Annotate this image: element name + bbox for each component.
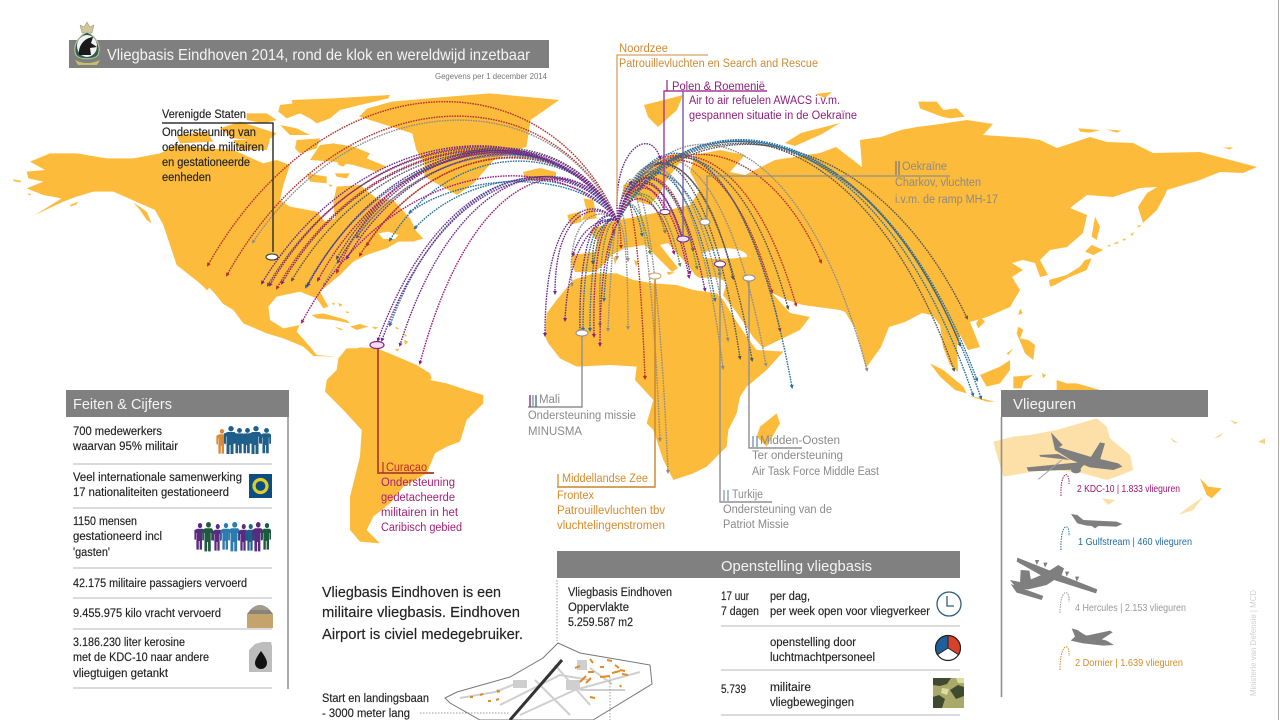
Caribbean and South America	[312, 303, 483, 543]
callout: Polen en Roemenie	[660, 80, 857, 242]
callout: Verenigde Staten: eenheden	[162, 172, 211, 184]
row: flight movements: 5.739	[721, 684, 746, 696]
fact: kerosine: 3.186.230 liter kerosine	[73, 637, 185, 649]
label: Hercules	[1060, 593, 1186, 614]
callout: Oekraine: Charkov, vluchten	[895, 177, 981, 189]
fact: medewerkers: waarvan 95% militair	[72, 441, 178, 453]
fact: mensen	[73, 516, 162, 559]
callout: Curacao: gedetacheerde	[381, 492, 455, 504]
flight arcs from Eindhoven	[208, 102, 981, 472]
runway label: - 3000 meter lang	[322, 708, 410, 720]
data date note: Gegevens per 1 december 2014	[435, 71, 547, 81]
title bar	[69, 40, 549, 68]
label: KDC-10: 2 KDC-10 | 1.833 vlieguren	[1077, 483, 1180, 495]
area facts: Oppervlakte	[568, 602, 629, 614]
runway label: Start en landingsbaan	[322, 693, 429, 705]
intro text: militaire vliegbasis. Eindhoven	[322, 604, 520, 621]
callout: Polen en Roemenie: Air to air refuelen AWACS i.v.m.	[689, 95, 840, 107]
panel: Openstelling vliegbasis	[557, 551, 964, 720]
fact: mensen: 1150 mensen	[73, 516, 137, 528]
title bar: Vliegbasis Eindhoven 2014, rond de klok en wereldwijd inzetbaar	[107, 47, 531, 64]
icon: EU flag	[249, 474, 272, 498]
callout: Verenigde Staten: Verenigde Staten	[162, 109, 246, 121]
callout: Polen en Roemenie: Polen & Roemenië	[672, 81, 765, 93]
row: flight movements: vliegbewegingen	[770, 697, 854, 709]
icon: clock	[937, 592, 961, 616]
fact: kerosine: vliegtuigen getankt	[73, 668, 169, 680]
callout: Middellandse Zee	[557, 273, 665, 532]
fact: mensen: gestationeerd incl	[73, 531, 162, 543]
callout: Mali: MINUSMA	[528, 426, 582, 438]
intro text: Vliegbasis Eindhoven is een	[322, 584, 501, 601]
intro text: Airport is civiel medegebruiker.	[322, 626, 523, 643]
label: Dornier: 2 Dornier | 1.639 vlieguren	[1075, 657, 1183, 669]
row: personnel: luchtmachtpersoneel	[770, 652, 875, 664]
callout: Middellandse Zee: Frontex	[557, 490, 594, 502]
callout: Midden-Oosten: Air Task Force Middle East	[752, 466, 880, 478]
label: Dornier	[1060, 647, 1183, 670]
callout: Oekraine: i.v.m. de ramp MH-17	[895, 194, 998, 206]
row: opening hours: 7 dagen	[721, 606, 759, 618]
callout: Midden-Oosten: Ter ondersteuning	[752, 450, 843, 462]
callout: Curacao: Ondersteuning	[381, 477, 455, 489]
row: opening hours: 17 uur	[721, 591, 749, 603]
fact: samenwerking: Veel internationale samenwerking	[73, 472, 242, 484]
heading: Feiten en Cijfers: Feiten & Cijfers	[73, 396, 172, 413]
callout: Curacao	[370, 342, 462, 534]
aircraft: KDC-10	[1027, 432, 1122, 479]
callout: Curacao: militairen in het	[381, 507, 459, 519]
aircraft: Hercules	[1010, 558, 1097, 600]
North America	[13, 95, 423, 357]
callout: Middellandse Zee: Middellandse Zee	[562, 473, 648, 485]
icon: air force roundel	[935, 635, 961, 661]
row: personnel	[770, 637, 875, 664]
area facts: 5.259.587 m2	[568, 617, 633, 629]
fact: vracht: 9.455.975 kilo vracht vervoerd	[73, 608, 221, 620]
icon: people stationed	[194, 522, 271, 551]
aircraft: Gulfstream	[1071, 514, 1122, 528]
row: opening hours: per dag,	[770, 591, 810, 603]
fact: mensen: 'gasten'	[73, 547, 110, 559]
callout: Noordzee: Patrouillevluchten en Search and Rescue	[619, 58, 818, 70]
row: opening hours: per week open voor vliegverkeer	[770, 606, 930, 618]
icon: squadron emblem	[75, 22, 100, 65]
callout: Mali: Mali	[539, 394, 560, 406]
row: flight movements	[721, 682, 854, 709]
callout: Verenigde Staten	[162, 109, 278, 260]
panel: Feiten en Cijfers	[66, 390, 289, 689]
heading: Vlieguren: Vlieguren	[1013, 396, 1076, 413]
label: Hercules: 4 Hercules | 2.153 vlieguren	[1075, 602, 1186, 614]
fact: medewerkers	[72, 426, 178, 453]
callout: Verenigde Staten: oefenende militairen	[162, 142, 264, 154]
airfield diagram	[445, 643, 652, 720]
credit line: Ministerie van Defensie | MCD	[1248, 590, 1258, 696]
runway label	[322, 693, 510, 720]
Australia and New Zealand	[993, 418, 1265, 515]
callout: Turkije: Ondersteuning van de	[723, 504, 832, 516]
callout: Middellandse Zee: vluchtelingenstromen	[557, 520, 665, 532]
fact: passagiers: 42.175 militaire passagiers vervoerd	[73, 578, 247, 590]
callout: Middellandse Zee: Patrouillevluchten tbv	[557, 505, 665, 517]
aircraft: Dornier	[1071, 628, 1114, 646]
area facts: Vliegbasis Eindhoven	[568, 587, 672, 599]
callout: Oekraine: Oekraïne	[902, 161, 947, 173]
Africa	[545, 273, 783, 480]
callout: Noordzee	[617, 43, 818, 205]
row: personnel: openstelling door	[770, 637, 856, 649]
callout: Mali: Ondersteuning missie	[528, 410, 636, 422]
row: opening hours	[721, 591, 930, 618]
Eurasia	[571, 120, 1257, 372]
world map	[13, 92, 1265, 543]
label: Gulfstream	[1061, 527, 1192, 550]
panel: Vlieguren	[1001, 390, 1208, 697]
fact: samenwerking: 17 nationaliteiten gestationeerd	[73, 487, 229, 499]
label: Gulfstream: 1 Gulfstream | 460 vlieguren	[1078, 536, 1192, 548]
intro text	[322, 584, 523, 643]
callout: Turkije: Turkije	[732, 489, 763, 501]
callout: Verenigde Staten: en gestationeerde	[162, 157, 250, 169]
callout: Noordzee: Noordzee	[619, 43, 668, 55]
fact: medewerkers: 700 medewerkers	[73, 426, 162, 438]
callout: Oekraine	[700, 161, 998, 225]
Europe and Asia islands	[567, 152, 688, 275]
callout: Midden-Oosten: Midden-Oosten	[760, 435, 840, 447]
callout: Curacao: Curaçao	[386, 462, 427, 474]
icon: jerry can	[249, 642, 272, 672]
area facts	[568, 587, 672, 629]
callout: Curacao: Caribisch gebied	[381, 522, 462, 534]
icon: camouflage	[933, 678, 964, 708]
fact: kerosine: met de KDC-10 naar andere	[73, 652, 209, 664]
callout: Turkije	[714, 261, 832, 531]
icon: people staff	[216, 426, 271, 454]
callout: Verenigde Staten: Ondersteuning van	[162, 127, 256, 139]
heading: Openstelling vliegbasis: Openstelling vliegbasis	[721, 558, 872, 575]
fact: samenwerking	[73, 472, 242, 499]
callout: Mali	[528, 330, 636, 438]
Greenland	[359, 93, 559, 195]
callout: Polen en Roemenie: gespannen situatie in de Oekraïne	[689, 110, 857, 122]
callout: Midden-Oosten	[743, 275, 880, 478]
row: flight movements: militaire	[770, 682, 811, 694]
label: KDC-10	[1061, 475, 1180, 496]
fact: kerosine	[73, 637, 209, 680]
icon: cargo	[247, 605, 273, 628]
callout: Turkije: Patriot Missie	[723, 519, 789, 531]
